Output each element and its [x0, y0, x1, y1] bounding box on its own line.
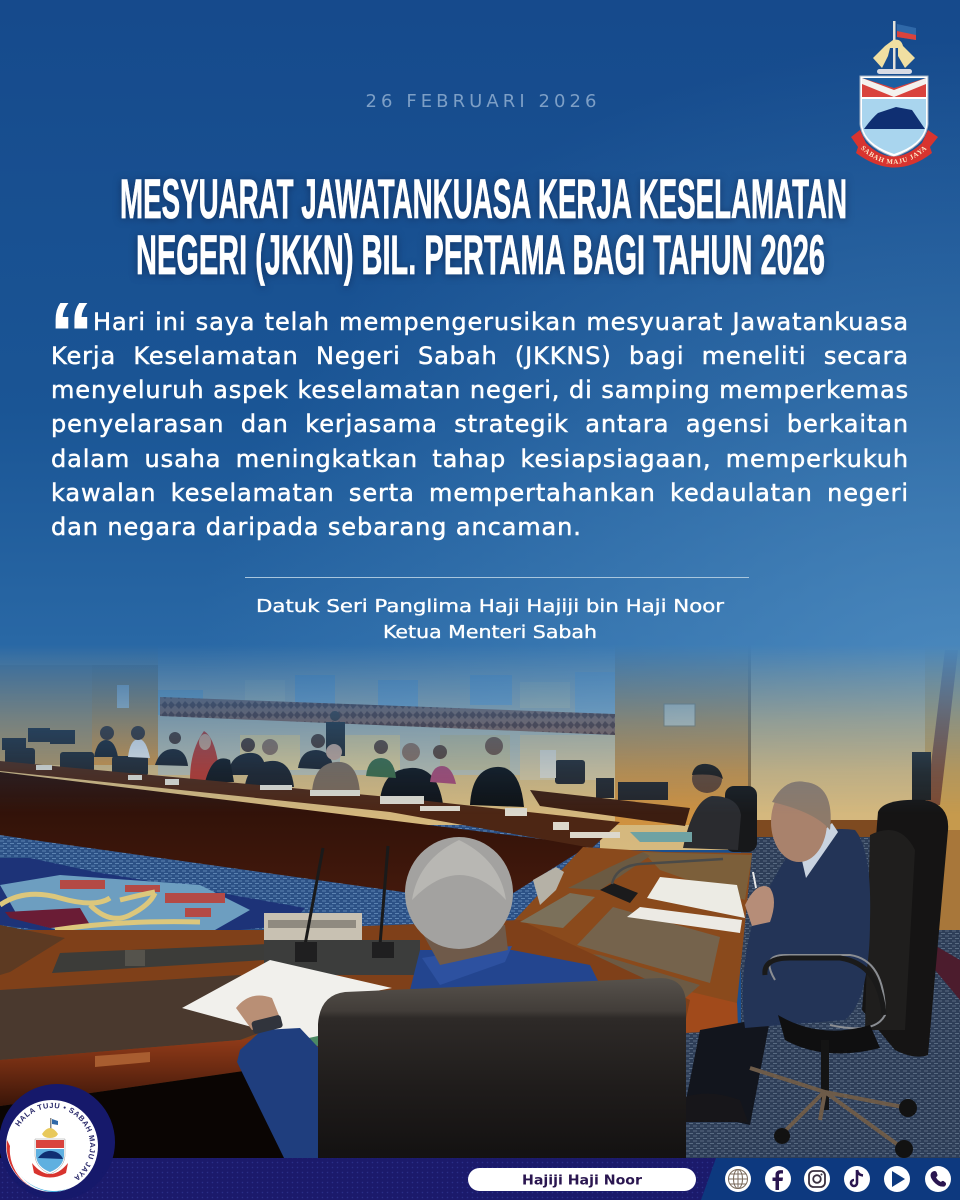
circular logo badge [0, 1084, 115, 1198]
carpet [0, 825, 600, 930]
right side carpet [686, 837, 960, 1158]
icon: instagram [804, 1166, 830, 1192]
name pill [468, 1168, 696, 1191]
icon: tiktok [844, 1166, 870, 1192]
badge motto: HALA TUJU • SABAH MAJU JAYA [15, 1102, 96, 1180]
near chair back [318, 978, 686, 1160]
near table [0, 913, 690, 1160]
wreath [877, 69, 912, 74]
right swivel chair base [750, 955, 917, 1158]
table desk items [520, 852, 745, 933]
quote body text: menyeluruh aspek keselamatan negeri, di samping memperkemas [51, 376, 909, 404]
attribution: Ketua Menteri Sabah [383, 622, 597, 643]
quote body text: dalam usaha meningkatkan tahap kesiapsiagaan, memperkukuh [51, 445, 909, 473]
far table body [0, 772, 590, 895]
near man arm [236, 996, 318, 1158]
name pill: Hajiji Haji Noor [522, 1174, 643, 1188]
clasped arms [873, 40, 915, 68]
icon: facebook [765, 1166, 791, 1192]
back wall [0, 651, 960, 850]
quote body text: Hari ini saya telah mempengerusikan mesyuarat Jawatankuasa [93, 308, 909, 336]
attribution: Datuk Seri Panglima Haji Hajiji bin Haji Noor [256, 596, 725, 617]
right man in suit [668, 781, 870, 1125]
icon: website globe [725, 1166, 751, 1192]
background gradient [0, 157, 960, 802]
quote mark: “ [49, 285, 94, 385]
shield [860, 76, 928, 157]
flagpole and flag [893, 21, 916, 69]
footer bar [0, 1158, 960, 1200]
curved table right side [500, 847, 752, 1033]
state crest [851, 21, 938, 168]
near man back of head and shoulders [405, 837, 598, 990]
attribution [256, 596, 725, 643]
motto ribbon: SABAH MAJU JAYA [860, 146, 927, 164]
motto ribbon [851, 130, 938, 168]
quote body text: Kerja Keselamatan Negeri Sabah (JKKNS) bagi meneliti secara [51, 342, 909, 370]
far table with attendees [0, 711, 690, 950]
wall base at right [939, 830, 960, 930]
meeting room photograph [0, 640, 960, 1160]
quote body text: kawalan keselamatan serta mempertahankan kedaulatan negeri [51, 479, 909, 507]
icon: phone [925, 1166, 951, 1192]
patterned rug [0, 858, 305, 938]
right chair [862, 800, 948, 1057]
date: 26 FEBRUARI 2026 [366, 91, 596, 112]
quote body text [51, 308, 909, 541]
badge crest [32, 1118, 68, 1178]
papers [182, 960, 392, 1046]
quote body text: dan negara daripada sebarang ancaman. [51, 513, 582, 541]
attribution rule [245, 577, 749, 578]
headline [120, 167, 847, 286]
man in dark suit at far right table [630, 764, 757, 852]
attendees row [94, 711, 556, 807]
dark red carpet strip [936, 947, 960, 1000]
quote body text: penyelarasan dan kerjasama strategik antara agensi berkaitan [51, 410, 909, 438]
icon: youtube play [884, 1166, 910, 1192]
microphones [264, 846, 420, 975]
